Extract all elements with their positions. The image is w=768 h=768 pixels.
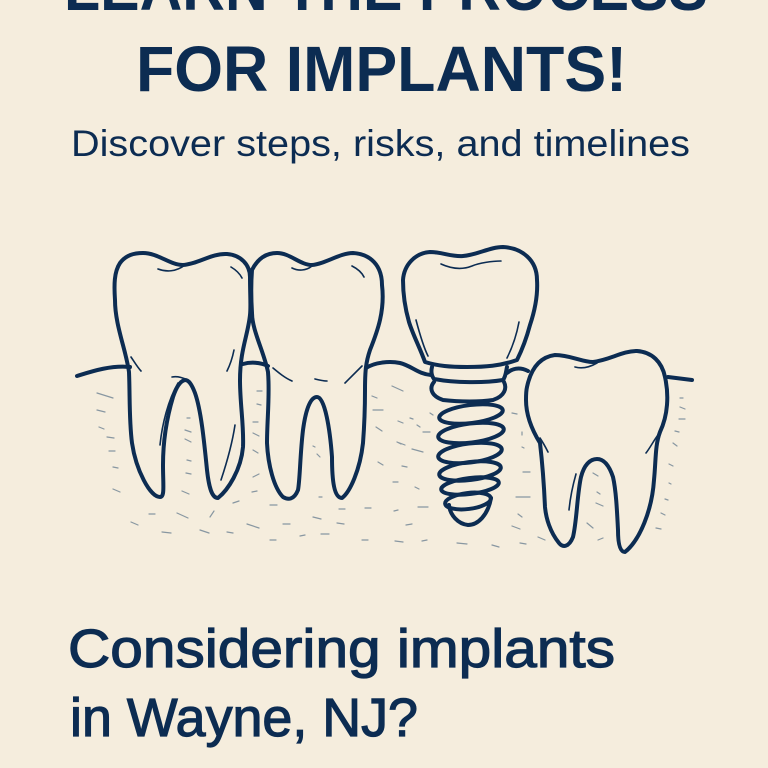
implant abutment collar — [431, 367, 507, 382]
dental implant with crown, abutment and screw — [403, 247, 537, 525]
illustration: teeth and implant in gum — [77, 247, 692, 552]
implant crown — [403, 247, 537, 367]
title line 2: FOR IMPLANTS! — [136, 33, 627, 105]
molar tooth 1 — [115, 253, 250, 498]
call to action heading line 1: Considering implants — [68, 619, 615, 679]
molar tooth 2 — [251, 253, 383, 499]
implant screw threads — [431, 382, 505, 402]
call to action heading line 2: in Wayne, NJ? — [70, 688, 418, 748]
gum line — [77, 362, 692, 380]
molar tooth 3 — [526, 351, 667, 552]
bone texture specks — [97, 386, 685, 547]
subtitle: Discover steps, risks, and timelines — [71, 123, 690, 164]
